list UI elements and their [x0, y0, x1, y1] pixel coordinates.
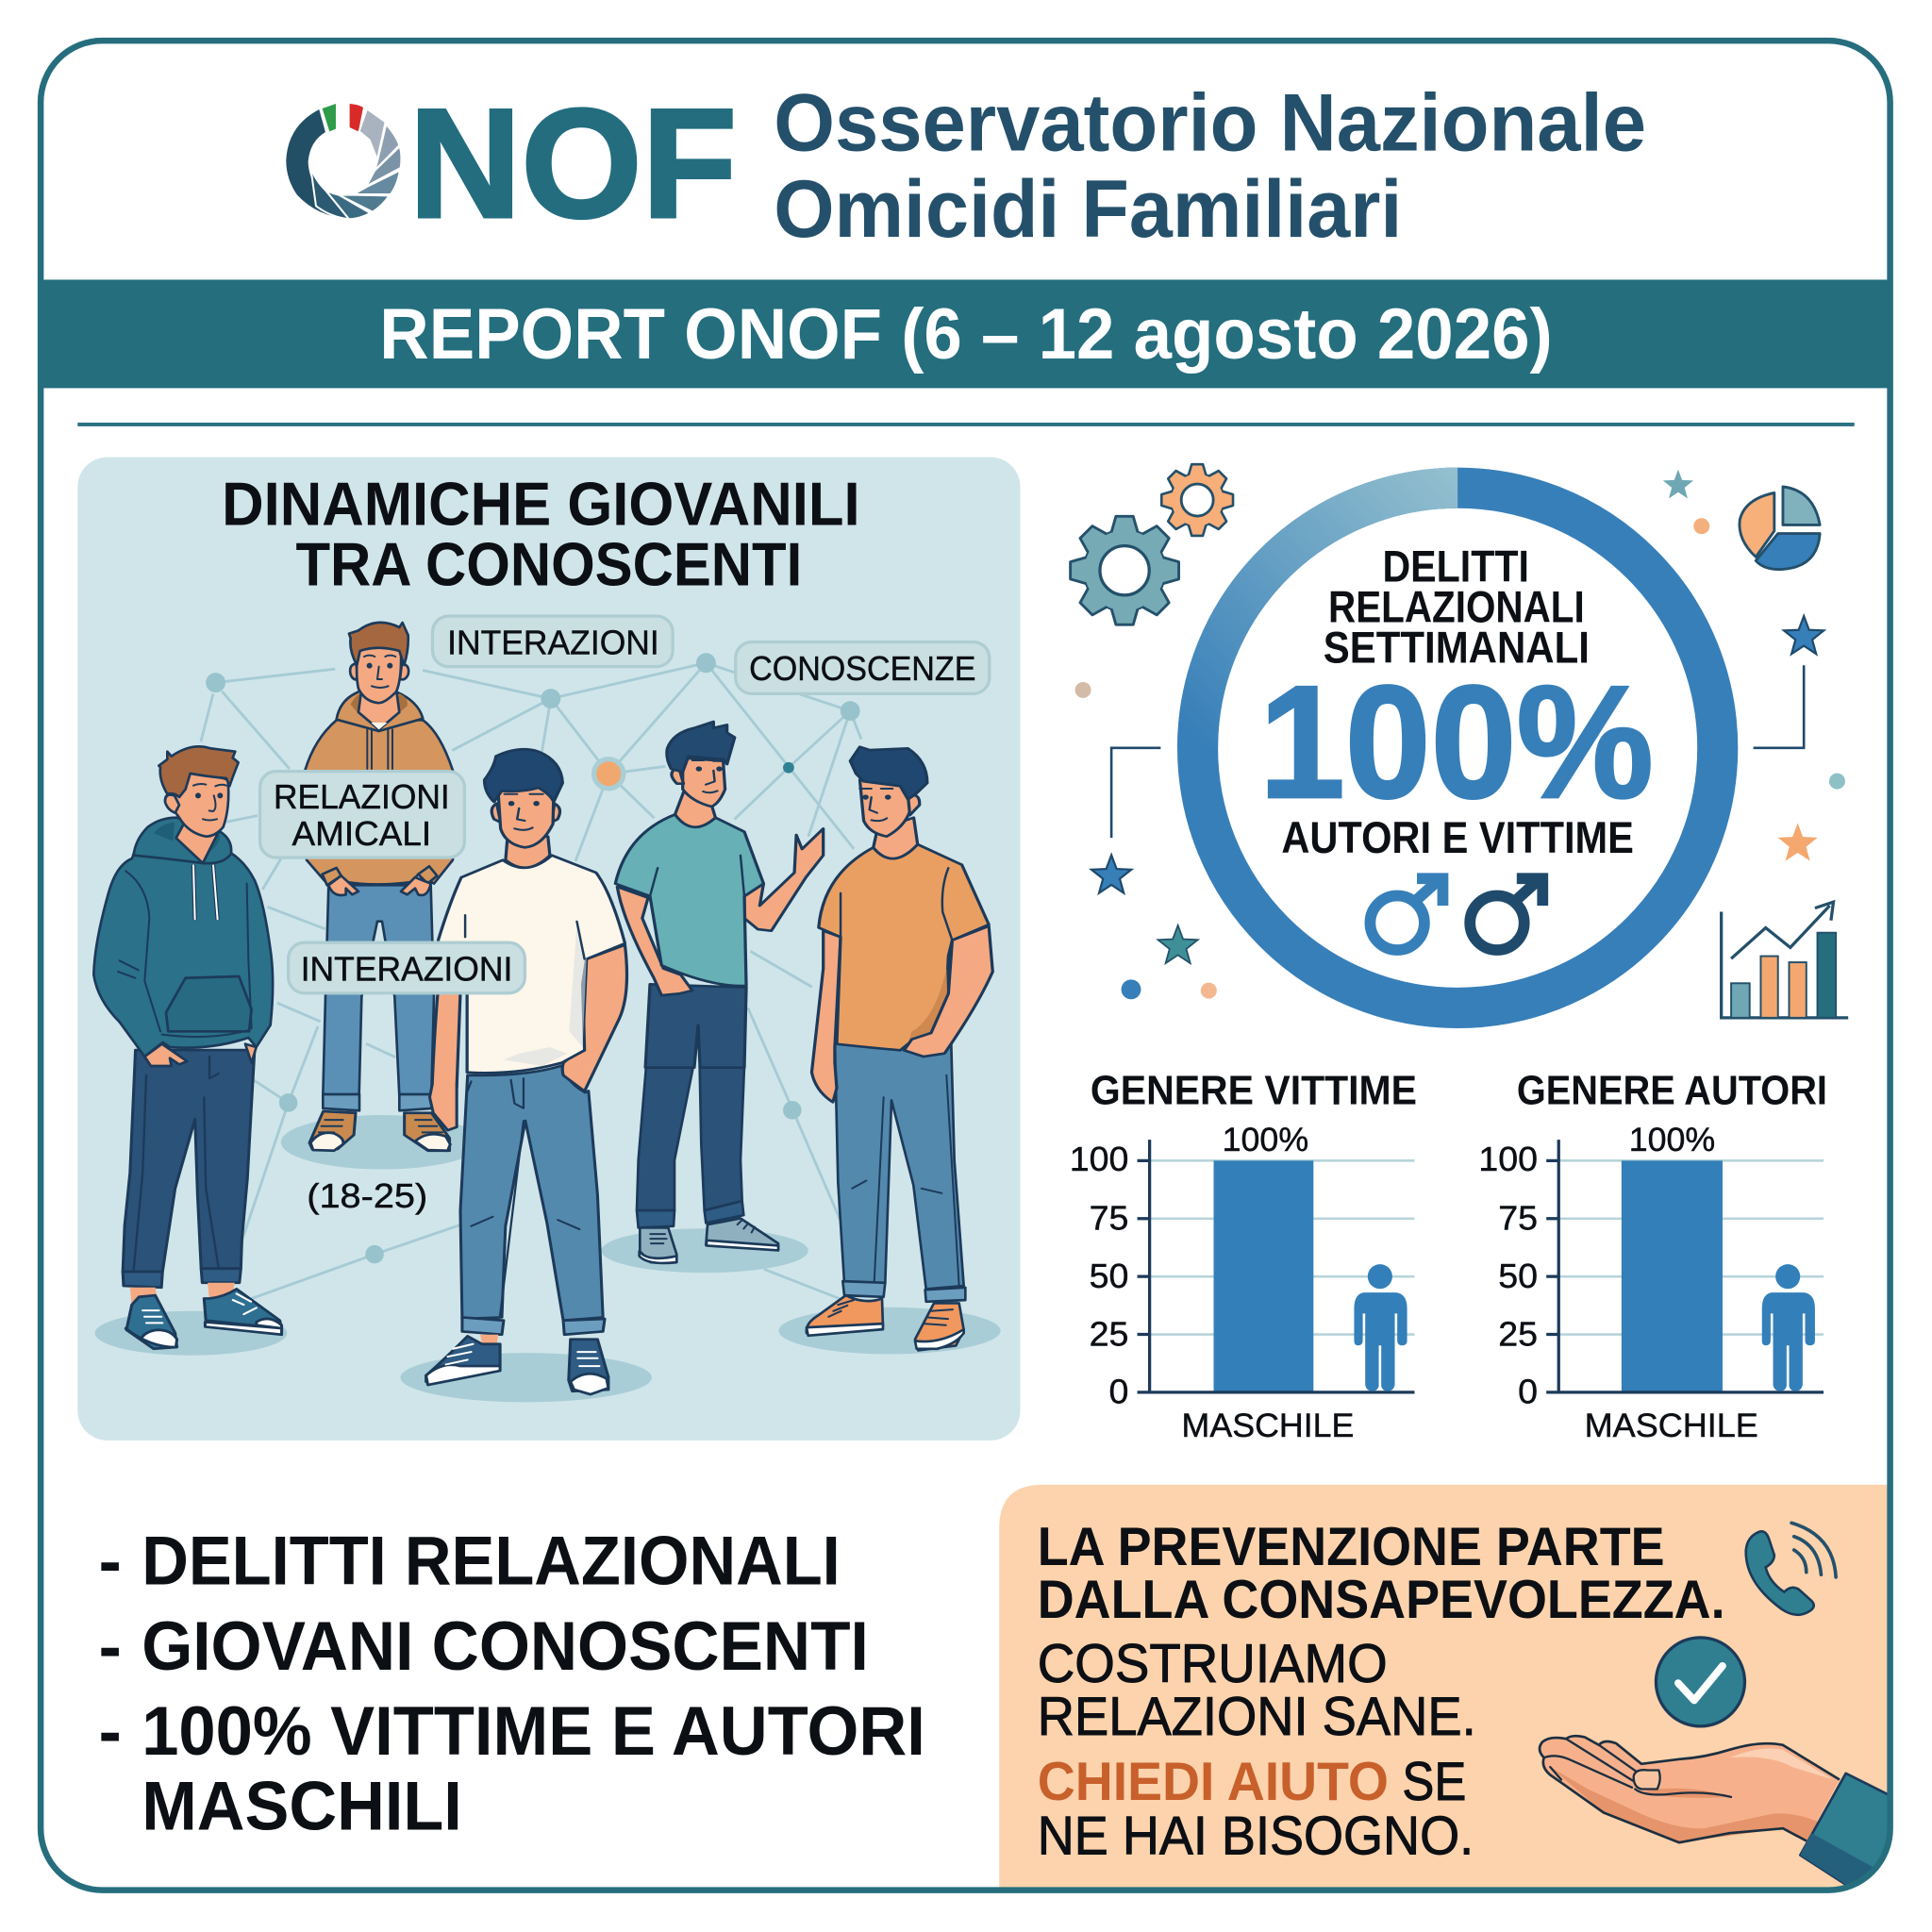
panel heading: TRA CONOSCENTI [295, 529, 802, 598]
axis labels [1478, 1122, 1758, 1444]
bullet list: - [98, 1693, 122, 1770]
icon: check badge [1656, 1638, 1744, 1726]
axis labels: MASCHILE [1585, 1407, 1758, 1444]
person: white t-shirt, center [426, 749, 627, 1394]
bullet list: DELITTI RELAZIONALI [142, 1524, 841, 1600]
bar [1214, 1160, 1313, 1392]
gauge text [1259, 541, 1654, 862]
icon: phone [1746, 1523, 1836, 1615]
bullet list: 100% VITTIME E AUTORI [142, 1693, 925, 1770]
chart heading: GENERE VITTIME [1091, 1068, 1417, 1113]
label: relazioni amicali [260, 772, 464, 858]
ground shadows [95, 1115, 1001, 1402]
hand: center person [429, 1085, 457, 1130]
decorative stars and dots [1075, 470, 1845, 999]
person: orange hoodie, back [305, 623, 453, 1151]
logo letters: NOF [409, 76, 737, 250]
icon: large gear [1071, 516, 1179, 625]
person: orange t-shirt [807, 747, 992, 1350]
chart heading: GENERE AUTORI [1517, 1068, 1827, 1113]
person: teal hoodie, left [93, 746, 282, 1349]
label: age range: (18-25) [307, 1176, 427, 1215]
panel: dinamiche giovanili [77, 458, 1020, 1441]
icon: open hand [1540, 1736, 1890, 1887]
bullet list: GIOVANI CONOSCENTI [142, 1608, 869, 1685]
title: Omicidi Familiari [774, 164, 1402, 255]
axis labels: 75 [1090, 1199, 1128, 1238]
prevention text [1038, 1517, 1725, 1867]
icon: small gear [1161, 464, 1233, 536]
donut gauge: 100% [1198, 488, 1718, 1008]
prevention text: LA PREVENZIONE PARTE [1038, 1517, 1665, 1577]
icon: pie chart [1740, 487, 1820, 570]
bullet list: - [98, 1608, 122, 1685]
chart: genere vittime [1070, 1068, 1417, 1444]
bullet list [98, 1524, 925, 1845]
label: relazioni amicali: RELAZIONI [274, 777, 450, 816]
label: conoscenze: CONOSCENZE [749, 649, 975, 688]
axis labels [1070, 1122, 1354, 1444]
person: teal t-shirt [615, 722, 824, 1263]
title [774, 77, 1646, 255]
label: relazioni amicali: AMICALI [292, 814, 431, 853]
shoes: back person [309, 1111, 450, 1151]
axis labels: 100 [1478, 1140, 1538, 1178]
logo ring [286, 104, 401, 219]
axis labels: 50 [1498, 1257, 1538, 1295]
axis labels: 0 [1518, 1373, 1538, 1411]
axis labels: 75 [1498, 1199, 1538, 1238]
gauge text: RELAZIONALI [1328, 582, 1585, 632]
label: interazioni lower: INTERAZIONI [301, 950, 512, 989]
bullet list: - [98, 1524, 122, 1600]
axis labels: 100% [1223, 1122, 1308, 1158]
axis labels: MASCHILE [1182, 1407, 1354, 1444]
panel heading [222, 469, 860, 598]
prevention text: CHIEDI AIUTO [1038, 1752, 1389, 1812]
prevention text: NE HAI BISOGNO. [1038, 1807, 1474, 1867]
header band [40, 279, 1891, 388]
icon: male figure [1762, 1264, 1815, 1391]
axis labels: 100 [1070, 1140, 1128, 1178]
gauge text: AUTORI E VITTIME [1281, 812, 1634, 862]
report heading: REPORT ONOF (6 – 12 agosto 2026) [379, 294, 1553, 375]
panel heading: DINAMICHE GIOVANILI [222, 469, 860, 538]
prevention text: DALLA CONSAPEVOLEZZA. [1038, 1570, 1725, 1630]
axis labels: 25 [1498, 1314, 1538, 1353]
axis labels: 50 [1090, 1257, 1128, 1295]
title: Osservatorio Nazionale [774, 77, 1646, 168]
prevention text: COSTRUIAMO [1038, 1634, 1388, 1694]
bar [1622, 1160, 1723, 1392]
icon: male symbols [1370, 877, 1542, 950]
label: interazioni top: INTERAZIONI [447, 624, 659, 662]
label: interazioni top [432, 616, 673, 667]
prevention text: RELAZIONI SANE. [1038, 1687, 1476, 1747]
gauge text: DELITTI [1382, 541, 1529, 591]
axis labels: 25 [1090, 1314, 1128, 1353]
bullet list: MASCHILI [142, 1769, 462, 1845]
gauge text: SETTIMANALI [1324, 623, 1590, 673]
icon: male figure [1354, 1264, 1407, 1391]
network graph [201, 653, 861, 1300]
axis labels: 0 [1109, 1373, 1128, 1411]
prevention text: SE [1402, 1752, 1466, 1812]
gauge text: 100% [1259, 652, 1654, 831]
chart: genere autori [1478, 1068, 1827, 1444]
axis labels: 100% [1629, 1122, 1715, 1158]
logo: ONOF [286, 76, 737, 250]
icon: bar chart with trend arrow [1722, 902, 1848, 1018]
